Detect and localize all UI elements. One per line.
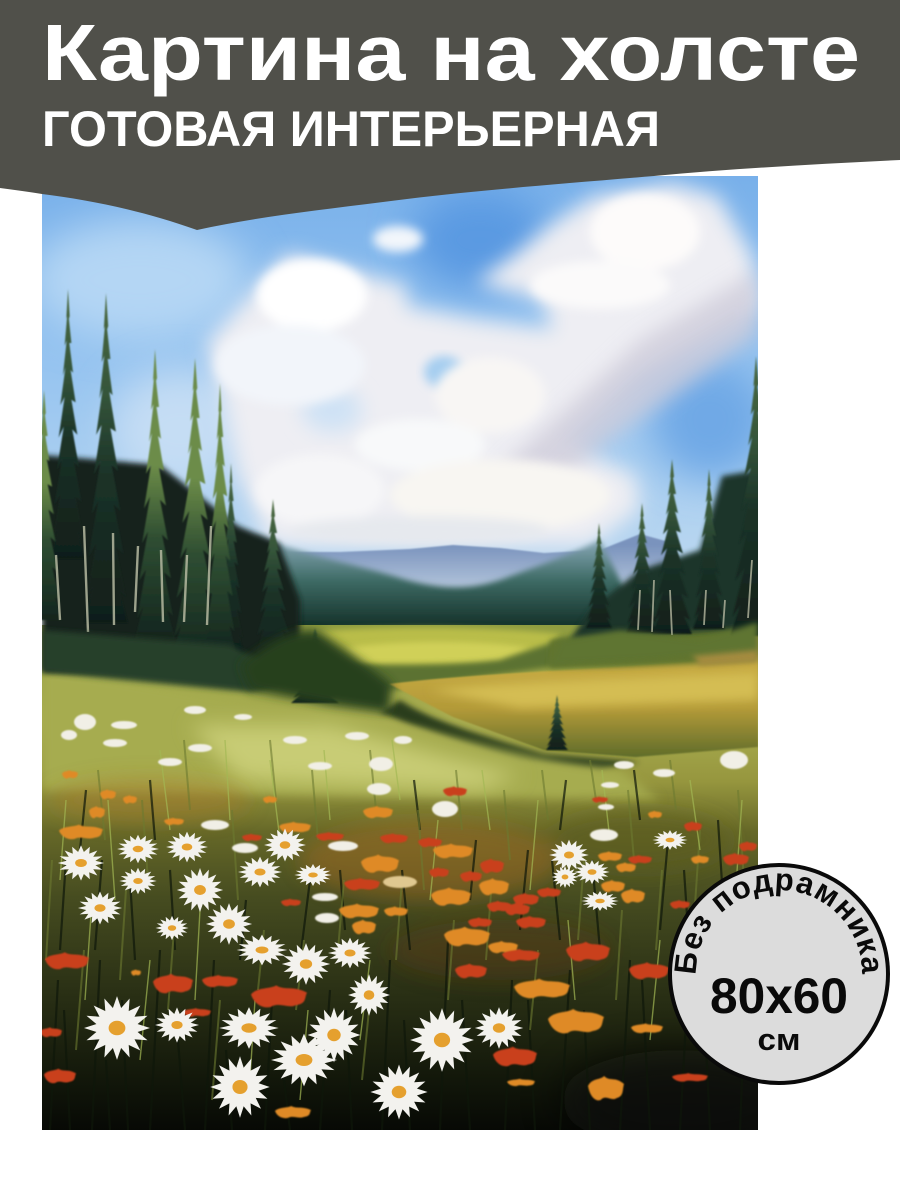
flower haze [50,778,730,980]
dark corner shade [582,1042,698,1072]
badge unit: см [758,1022,800,1057]
mid-meadow small flowers [61,706,748,923]
distant mountains [296,534,667,590]
left forest [26,289,392,713]
title: Картина на холсте [42,8,860,97]
painting: meadow landscape [26,176,800,1150]
clouds [206,183,758,546]
badge curved label: Без подрамника [674,873,878,974]
orange and red poppies [40,770,757,1118]
size badge [634,834,890,1085]
subtitle: ГОТОВАЯ ИНТЕРЬЕРНАЯ [42,101,660,157]
white daisies [58,828,688,1120]
badge size: 80x60 [710,968,848,1024]
sky [30,176,770,576]
dark grass strokes [50,770,748,1130]
light grass strokes [60,740,742,1110]
right forest [546,356,782,750]
header banner [0,0,900,230]
olive grass strokes [46,740,744,1100]
valley forest [259,535,624,625]
sunlit fields [42,622,758,800]
field base [42,625,758,1130]
